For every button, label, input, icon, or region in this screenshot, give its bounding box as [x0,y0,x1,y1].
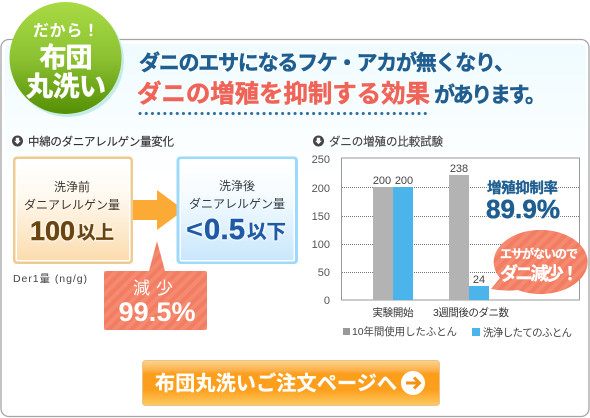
headline [137,51,546,114]
arrow [133,190,184,230]
bar values [373,163,485,286]
badge: 布団丸洗い: 布団 [40,43,92,73]
axis labels: 0 [324,295,330,307]
bar values: 200 [395,175,413,187]
speech balloon: エサがないので [500,246,578,261]
card: after washing: 0.5 [204,214,245,246]
card: after washing: < [186,214,203,244]
axis labels [312,154,330,307]
badge: 布団丸洗い: だから！ [33,22,99,40]
callout: 99.5% decrease: 減 少 [133,279,173,298]
card: before washing: 以上 [77,222,114,243]
axis labels: 250 [312,154,330,166]
bar values: 238 [450,163,468,175]
axis labels: 200 [312,183,330,195]
axis labels: 150 [312,211,330,223]
headline: ダニのエサになるフケ・アカが無くなり、 [139,51,515,75]
badge: 布団丸洗い: 丸洗い [26,72,106,102]
card: after washing: ダニアレルゲン量 [189,196,285,211]
suppression rate: 89.9% [486,194,560,224]
card: before washing: 100 [30,216,75,246]
badge: 布団丸洗い [10,2,124,117]
callout: 99.5% decrease: 99.5% [118,297,196,327]
card: after washing: 以下 [247,221,286,243]
card: before washing: 洗浄前 [54,179,90,194]
section heading: allergen change: 中綿のダニアレルゲン量変化 [28,134,174,148]
callout: 99.5% decrease [104,241,207,330]
bars [373,175,489,300]
legend: 10年間使用したふとん [352,325,457,338]
legend: 洗浄したてのふとん [483,326,572,339]
unit note: Der1量 (ng/g) [13,273,87,285]
legend [343,325,572,339]
suppression rate: 増殖抑制率 [487,179,558,197]
card: after washing [176,156,298,264]
axis labels: 50 [318,267,330,279]
speech balloon: ダニ減少！ [500,263,579,284]
headline: があります。 [434,83,546,107]
speech balloon [491,230,588,294]
icon: arrow circle [401,371,425,395]
category labels [372,306,510,319]
suppression rate [486,179,560,224]
section heading: mite test: ダニの増殖の比較試験 [329,134,444,148]
card: after washing: 洗浄後 [219,179,255,193]
category labels: 3週間後のダニ数 [433,306,510,319]
button [142,360,440,406]
axis labels: 100 [312,239,330,251]
bar values: 24 [473,274,485,286]
card: before washing: ダニアレルゲン量 [24,197,120,212]
category labels: 実験開始 [372,306,414,319]
bar chart [312,154,580,319]
headline: ダニの増殖を抑制する効果 [137,79,430,108]
button: 布団丸洗いご注文ページへ [155,371,397,395]
card: before washing [13,156,133,264]
bar values: 200 [373,175,391,187]
